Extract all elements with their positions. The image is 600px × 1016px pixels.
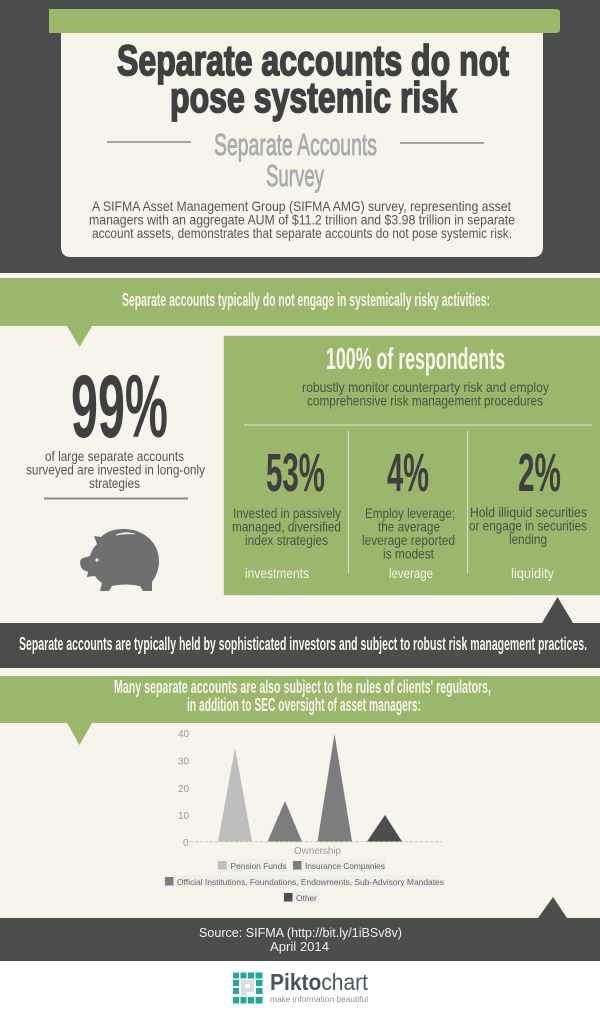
subtitle: Separate Accounts (214, 127, 377, 162)
stat: leverage: leverage reported (362, 532, 455, 548)
header ribbon (49, 9, 560, 33)
stat: investments: 53% (266, 443, 325, 503)
legend: Other (296, 893, 317, 903)
stat: liquidity (469, 443, 587, 581)
icon: logo mark (233, 972, 262, 1004)
intro text: managers with an aggregate AUM of $11.2 trillion and $3.98 trillion in separate (89, 212, 515, 228)
panel: 99 percent stat (26, 356, 205, 498)
footer source: Source: SIFMA (http://bit.ly/1iBSv8v) (199, 925, 402, 940)
stat: liquidity: lending (509, 531, 547, 547)
stat: leverage: leverage (389, 565, 433, 581)
section banner: clients' regulators (0, 676, 600, 745)
y axis labels: 10 (178, 811, 190, 822)
footer source: April 2014 (270, 939, 329, 954)
panel: 99 percent stat: strategies (89, 475, 140, 491)
subtitle: Survey (266, 158, 324, 193)
title: pose systemic risk (170, 74, 457, 122)
y axis labels (178, 729, 190, 849)
stat: liquidity: 2% (518, 443, 561, 503)
y axis labels: 40 (178, 729, 190, 740)
panel: 99 percent stat: of large separate accounts (45, 448, 184, 464)
title (117, 37, 509, 122)
stat: liquidity: liquidity (511, 565, 554, 581)
icon: piggy bank (80, 529, 159, 591)
header card (61, 33, 543, 257)
stat: leverage: Employ leverage; (365, 505, 455, 521)
header panel (0, 0, 600, 273)
intro text (89, 198, 515, 241)
panel description: comprehensive risk management procedures (307, 392, 543, 408)
stat: investments: index strategies (245, 532, 328, 548)
intro text: account assets, demonstrates that separate accounts do not pose systemic risk. (92, 225, 512, 241)
section banner: risky activities (0, 278, 600, 347)
section banner: sophisticated investors (0, 597, 600, 668)
panel: 100 percent of respondents (224, 336, 600, 596)
footer source (0, 897, 600, 961)
y axis labels: 30 (178, 756, 190, 768)
stat: investments: managed, diversified (232, 518, 341, 534)
logo: Piktochart (233, 969, 369, 1004)
stat: leverage (362, 443, 455, 581)
legend (163, 859, 444, 903)
chart: ownership triangles (163, 729, 444, 903)
axis title: Ownership (294, 846, 341, 857)
legend: Pension Funds (230, 861, 286, 871)
panel description (302, 379, 549, 408)
legend: Official Institutions, Foundations, Endowments, Sub-Advisory Mandates (177, 877, 444, 887)
y axis labels: 20 (178, 784, 190, 795)
y axis labels: 0 (183, 838, 189, 849)
panel: 99 percent stat: surveyed are invested in long-only (26, 462, 205, 478)
panel description: robustly monitor counterparty risk and employ (302, 379, 549, 395)
stat: investments: investments (245, 565, 309, 581)
subtitle (107, 127, 484, 193)
stat: leverage: is modest (383, 546, 434, 562)
stat: investments (232, 443, 341, 581)
stat: investments: Invested in passively (233, 505, 341, 521)
logo: Piktochart: Piktochart (270, 969, 369, 995)
intro text: A SIFMA Asset Management Group (SIFMA AMG) survey, representing asset (92, 198, 511, 214)
panel: 99 percent stat: 99% (71, 356, 168, 456)
section banner: clients' regulators: in addition to SEC oversight of asset managers: (187, 694, 421, 715)
stat: leverage: 4% (387, 443, 429, 503)
stat: leverage: the average (378, 518, 440, 534)
bars (218, 734, 402, 842)
legend: Insurance Companies (305, 861, 385, 871)
logo: Piktochart: make information beautiful (270, 995, 368, 1004)
